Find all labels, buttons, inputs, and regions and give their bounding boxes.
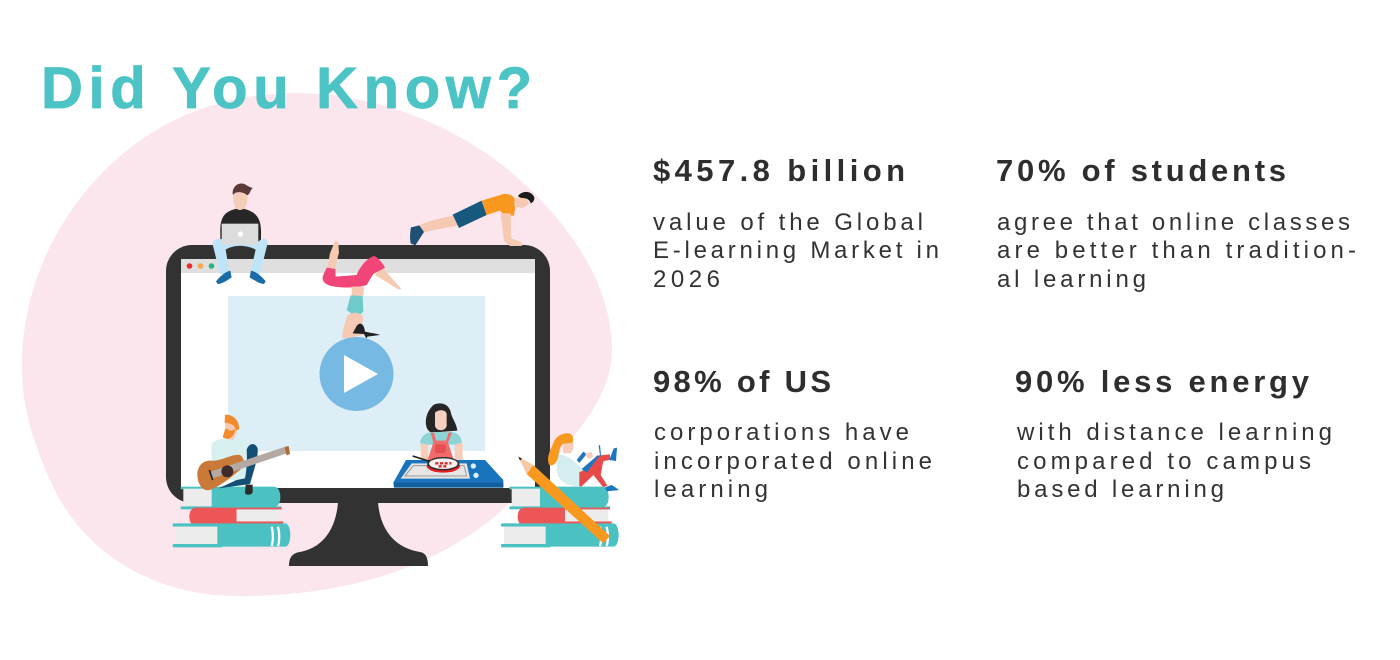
description [1016,419,1332,503]
description [654,419,932,503]
description: E-learning Market in [653,237,939,264]
monitor stand [289,502,428,566]
monitor screen [181,259,535,488]
description: are better than tradition- [997,237,1356,264]
video panel [228,296,485,451]
monitor frame [166,245,550,503]
description: corporations have [654,419,909,446]
heading: 98% of US [653,364,831,399]
heading: 70% of students [996,153,1286,188]
description: based learning [1017,476,1224,503]
title: Did You Know? [41,56,532,121]
stat: market value [653,153,939,293]
description [997,209,1356,293]
description: value of the Global [653,209,923,236]
figure: guitarist [197,415,290,495]
description: learning [654,476,768,503]
description: with distance learning [1016,419,1332,446]
description [653,209,939,293]
right book stack [501,487,619,547]
illustration: computer monitor [166,245,550,566]
pencil [518,457,610,543]
play button [320,337,394,411]
figure: cook at stove [393,403,503,488]
stat: corporations [653,364,932,503]
heading: $457.8 billion [653,153,905,188]
description: 2026 [653,266,720,293]
left book stack [173,487,290,547]
heading: 90% less energy [1015,364,1310,399]
stat: students [996,153,1356,293]
pink background blob [22,93,612,596]
description: agree that online classes [997,209,1350,236]
browser buttons [187,263,214,269]
figure: man with laptop [212,184,268,284]
description: al learning [997,266,1146,293]
browser bar [181,259,535,273]
description: incorporated online [654,448,932,475]
description: compared to campus [1017,448,1311,475]
stat: energy [1015,364,1332,503]
figure: reader [548,433,619,491]
figure: man doing plank [410,192,534,246]
figure: woman in yoga headstand [323,241,402,338]
